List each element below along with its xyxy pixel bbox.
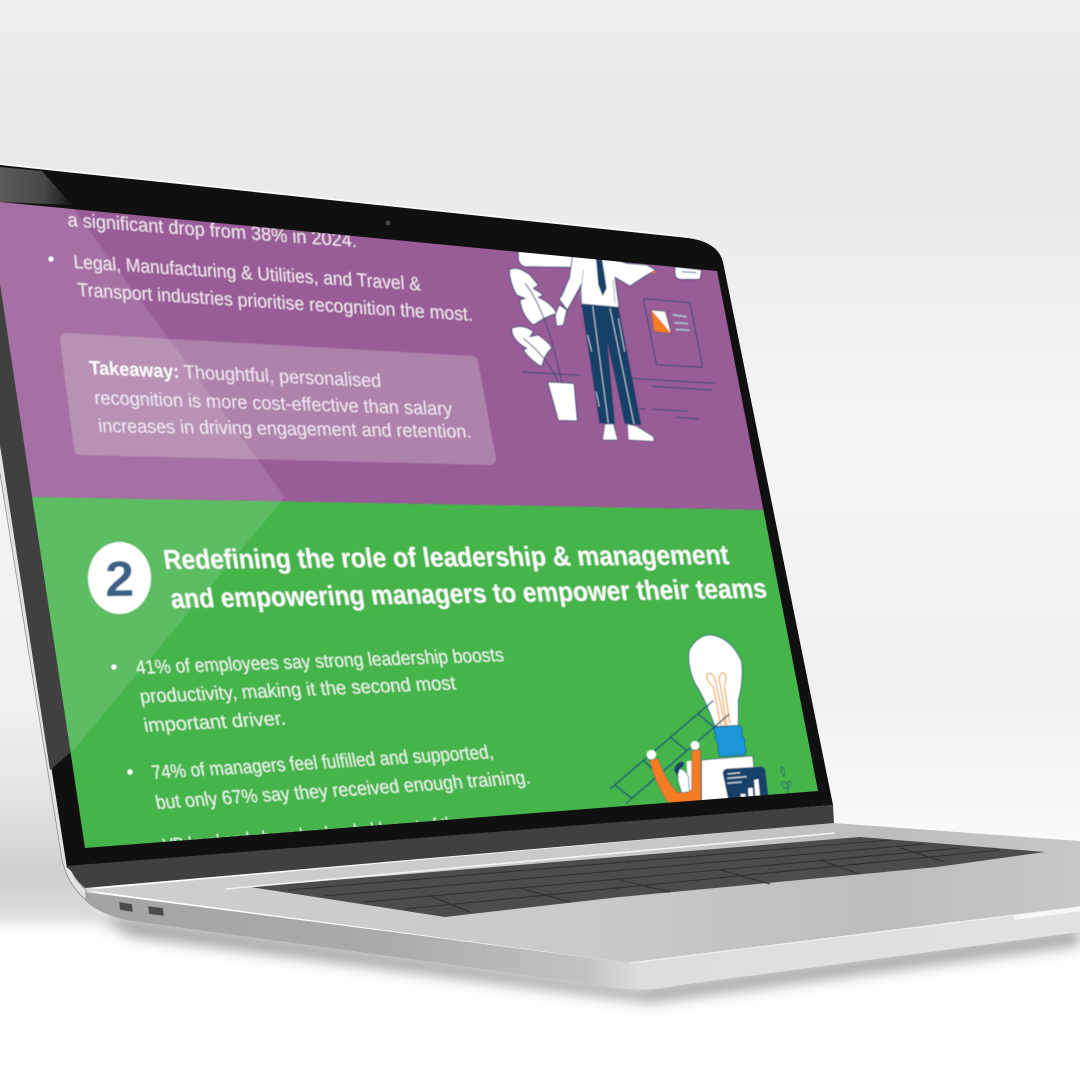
small box [675,267,702,279]
hands [647,750,656,759]
plant pot [548,382,577,421]
hand [555,305,567,326]
leadership bullets: but only 67% say they received enough training. [153,767,532,814]
bezel glare left [0,284,71,770]
bullet text: significant drop: a significant drop from 38% in 2024. [67,210,358,252]
laptop lid [0,164,834,900]
laptop shadow [0,700,1080,1002]
bullet marker [48,256,54,262]
head [677,769,689,793]
bullet text: industries: Legal, Manufacturing & Utilities, and Travel & [73,252,422,295]
webcam [386,221,390,225]
lip top highlight [630,907,1080,963]
panel: purple section [0,190,765,510]
chart card [643,299,703,367]
callout: takeaway: increases in driving engagement and retention. [97,416,473,443]
tie [596,258,607,296]
keyboard [250,837,1045,917]
shoes [603,424,618,440]
lid bezel [0,165,833,868]
trousers [581,303,641,425]
callout: takeaway [66,339,490,459]
lid silver rim [0,440,86,900]
heading text: Redefining the role of leadership & management [161,539,731,575]
shirt and arms [559,255,656,310]
usb ports [119,902,164,916]
trackpad edge highlight [1014,909,1080,918]
panel: green section [30,497,830,860]
figure arms and torso [649,749,701,803]
hinge highlight [225,833,835,889]
screen glare [0,165,285,752]
sprout [781,767,791,793]
keyboard key lines [288,840,1000,912]
hinge strip [66,805,834,888]
leadership bullets [111,644,532,857]
number badge: 2 [105,551,135,607]
ladder [610,701,729,803]
heading: section 2 [88,539,769,614]
bezel glare top [0,167,72,205]
bulb [689,635,742,727]
leadership bullets: important driver. [142,708,288,737]
floor lines [522,372,715,419]
laptop base [85,823,1080,990]
illustration: lightbulb, ladder and figure [610,635,791,803]
dark card [723,767,768,800]
top lid highlight [0,164,688,237]
callout: takeaway: Takeaway: Thoughtful, personalised [88,358,382,392]
number badge [88,542,151,614]
filament [707,673,730,725]
callout: takeaway: recognition is more cost-effective than salary [93,388,454,420]
bulb base [714,725,746,757]
sign board [518,250,573,267]
leadership bullets: productivity, making it the second most [138,672,458,708]
base deck [85,823,1080,963]
screen [0,165,830,860]
leadership bullets: 41% of employees say strong leadership boosts [134,644,506,679]
base front lip [85,892,1080,990]
recognition text [48,210,474,326]
plant leaves [509,268,557,325]
leadership bullets: 74% of managers feel fulfilled and supported, [150,741,495,784]
leadership bullets: VP-level and above leaders hold most of the [161,813,465,857]
heading: section 2: and empowering managers to empower their teams [168,573,769,614]
recognition text: Transport industries prioritise recognition the most. [77,280,474,326]
box [702,756,757,802]
illustration: man with plant and chart [509,250,715,441]
